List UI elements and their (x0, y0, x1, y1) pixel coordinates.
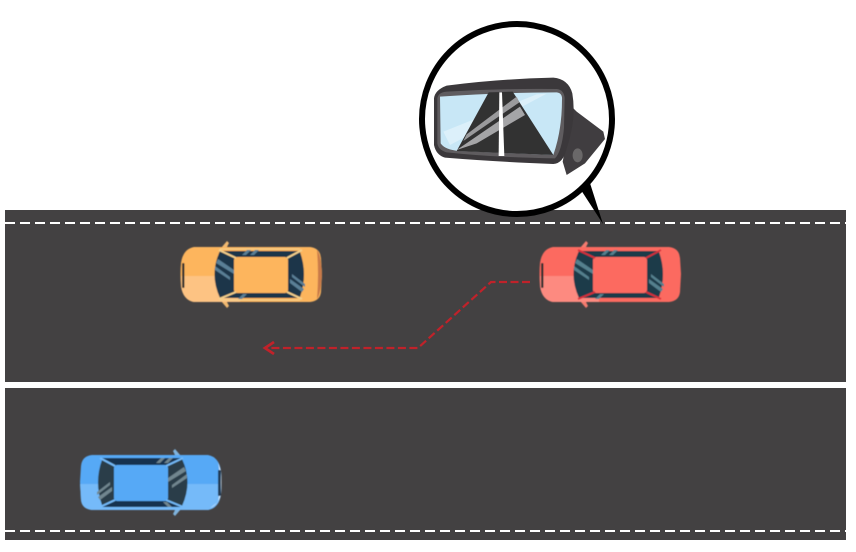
mirror inner rim (437, 89, 565, 158)
car: red (540, 241, 681, 308)
callout bubble (422, 24, 612, 224)
road: lower lane (5, 388, 846, 540)
icon: side mirror (434, 78, 605, 175)
road: upper lane (5, 210, 846, 382)
mirror housing (434, 78, 574, 164)
car: orange (180, 241, 322, 308)
mirror glass (440, 92, 562, 155)
mirror arm (563, 105, 605, 175)
mirror knob (573, 148, 583, 162)
arrow: lane change path (265, 282, 530, 354)
car: blue (80, 449, 222, 516)
road in mirror (457, 92, 553, 155)
